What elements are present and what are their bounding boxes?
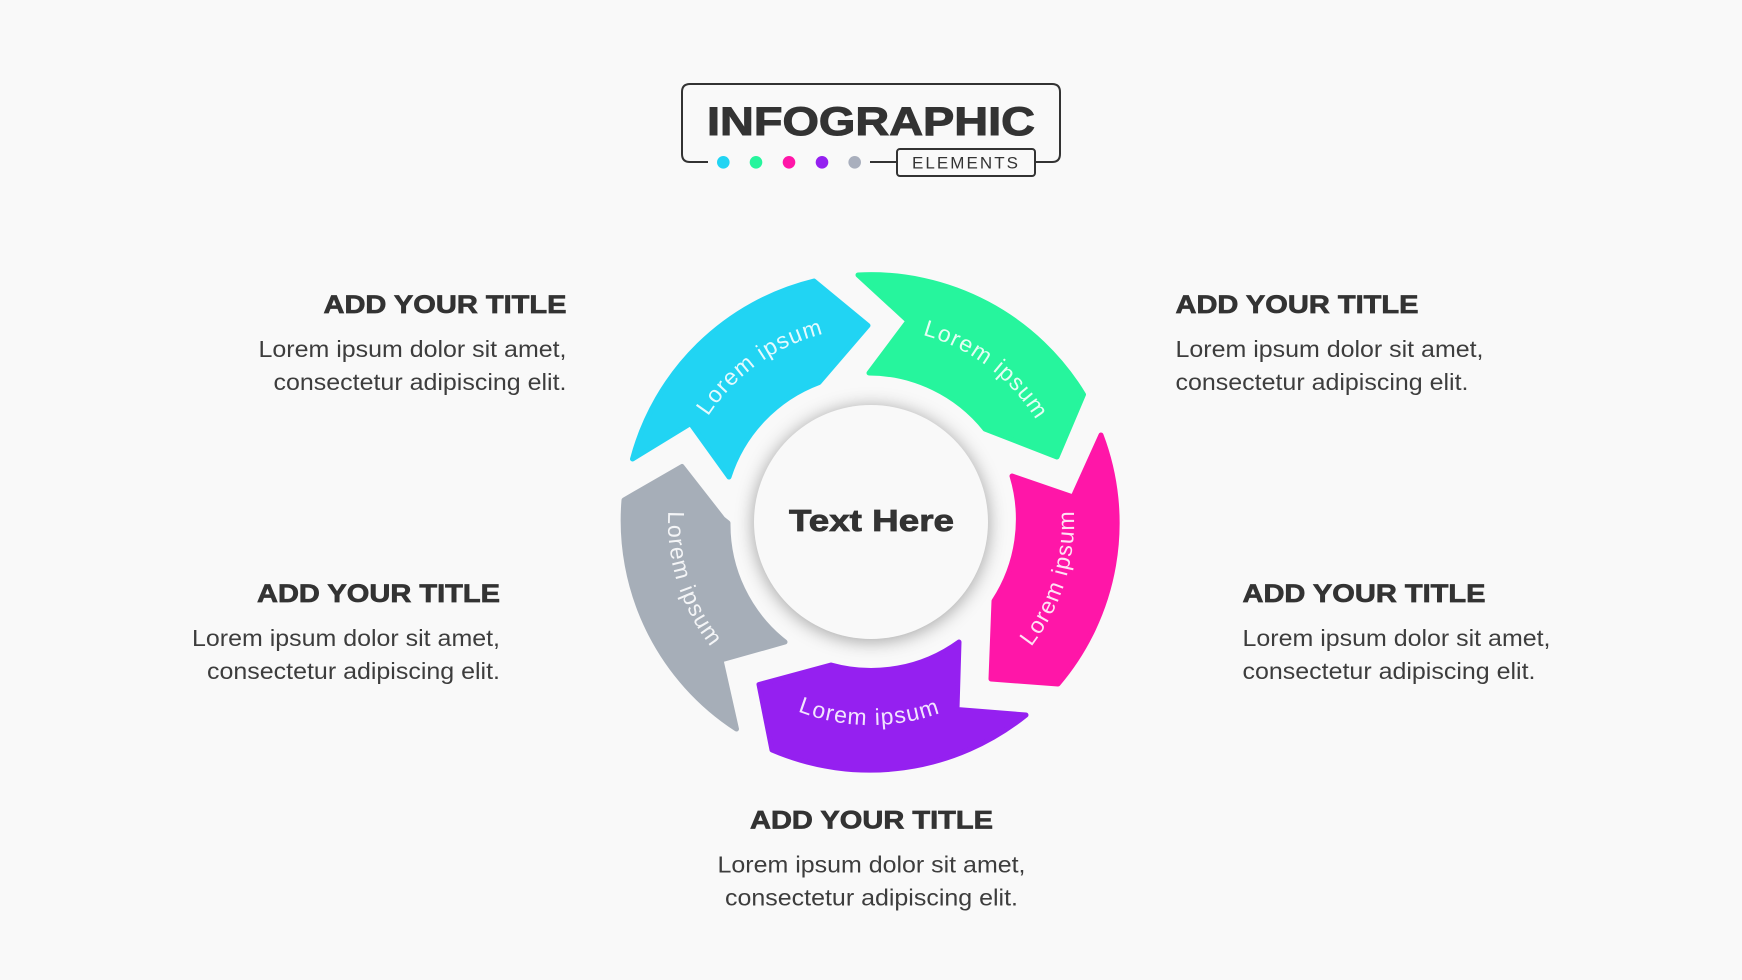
heading: ADD YOUR TITLE <box>750 806 993 834</box>
subtitle: ELEMENTS <box>897 149 1035 176</box>
segment: grey arrow <box>620 464 788 732</box>
segment: green arrow <box>856 272 1086 460</box>
heading: ADD YOUR TITLE <box>1242 580 1486 608</box>
body text: consectetur adipiscing elit. <box>207 658 500 684</box>
segment: blue arrow <box>630 278 870 480</box>
body text <box>192 625 500 684</box>
body text: consectetur adipiscing elit. <box>725 884 1018 910</box>
heading: ADD YOUR TITLE <box>1176 291 1418 319</box>
text block: middle right <box>1242 580 1550 684</box>
text block: middle left <box>192 580 500 684</box>
title badge <box>682 84 1060 176</box>
segment: magenta arrow <box>988 432 1120 686</box>
heading: ADD YOUR TITLE <box>324 291 566 319</box>
centre circle <box>754 405 988 639</box>
heading: ADD YOUR TITLE <box>257 580 500 608</box>
body text <box>258 336 566 395</box>
title frame <box>682 84 1060 162</box>
body text: Lorem ipsum dolor sit amet, <box>258 336 566 362</box>
segment: purple arrow: Lorem ipsum <box>799 697 938 730</box>
centre text: Text Here <box>789 503 954 538</box>
segment: purple arrow <box>756 640 1028 773</box>
body text <box>1176 336 1484 395</box>
text block: top right <box>1176 291 1484 395</box>
text block: bottom centre <box>718 806 1026 910</box>
title: INFOGRAPHIC: INFOGRAPHIC <box>707 100 1035 144</box>
body text: consectetur adipiscing elit. <box>1242 658 1536 684</box>
subtitle: ELEMENTS: ELEMENTS <box>912 154 1018 172</box>
body text: Lorem ipsum dolor sit amet, <box>192 625 500 651</box>
body text: Lorem ipsum dolor sit amet, <box>1242 625 1550 651</box>
text block: top left <box>258 291 566 395</box>
body text <box>1242 625 1550 684</box>
segment: grey arrow: Lorem ipsum <box>668 513 719 646</box>
body text: consectetur adipiscing elit. <box>274 369 566 395</box>
segment: magenta arrow: Lorem ipsum <box>1020 512 1074 646</box>
body text <box>718 852 1026 910</box>
panel: cycle diagram <box>620 272 1120 773</box>
body text: consectetur adipiscing elit. <box>1176 369 1468 395</box>
segment: green arrow: Lorem ipsum <box>924 320 1044 418</box>
segment: blue arrow: Lorem ipsum <box>696 323 822 415</box>
body text: Lorem ipsum dolor sit amet, <box>1176 336 1484 362</box>
colour dots <box>717 156 861 169</box>
body text: Lorem ipsum dolor sit amet, <box>718 852 1026 878</box>
